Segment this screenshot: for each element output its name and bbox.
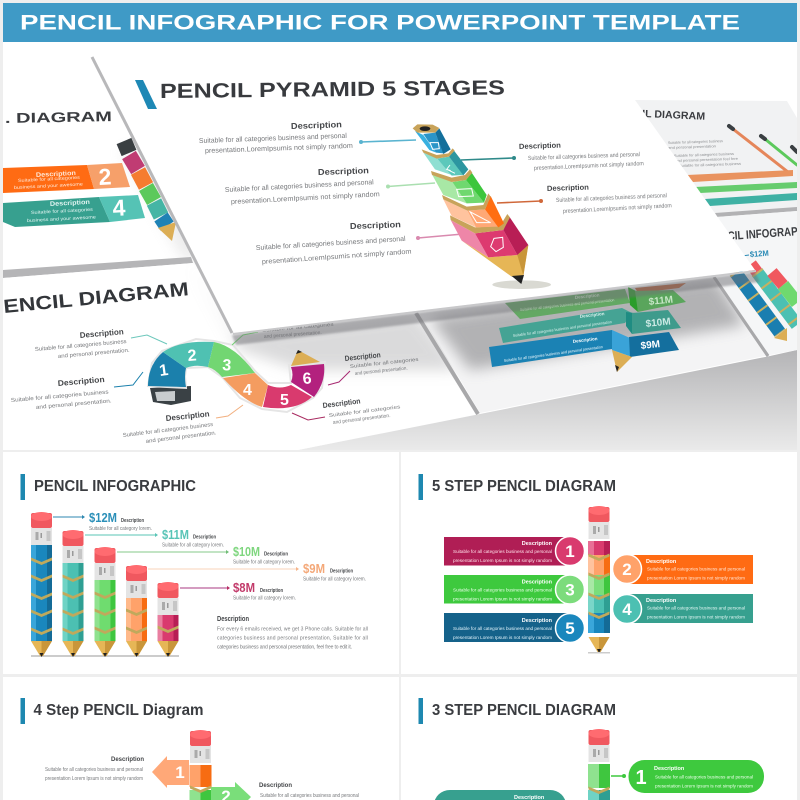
callout $11M: $11M [162,527,189,542]
slanted pencil [124,141,176,241]
step 1: Description [522,541,553,547]
connectors [114,332,350,420]
step 4: presentation Lorem Ipsum is not simply random [647,614,745,620]
small body text: Suitable for all categories business [679,162,741,168]
slide: value banners pencil [420,276,770,413]
callout $9M: Description [330,568,353,574]
panel title: 5 STEP PENCIL DIAGRAM [432,478,616,495]
step 2 pill [434,790,566,800]
slide: top left diagram [3,112,193,278]
right description 1 [519,141,644,172]
step 2 text: Suitable for all categories business and personal [260,793,359,799]
slide: bottom left curve diagram [2,262,480,450]
step 4: Description [646,598,677,604]
callout $9M [148,561,366,582]
left description 1 [199,119,353,155]
curve diagram labels [11,322,419,445]
panel: pencil infographic [3,452,399,674]
arrow 1: 1 [175,763,185,782]
curve diagram labels: Description [344,350,381,363]
description paragraph: categories business and personal presentation, Suitable for all [217,636,368,642]
step 2: presentation Lorem Ipsum is not simply random [647,576,745,582]
step 3: Suitable for all categories business and personal [453,588,552,594]
teal banner 4: business and your awesome [27,214,97,223]
value label: $12M [750,249,769,259]
curve diagram labels: and personal presentation. [333,413,391,426]
teal banner $10M: Description [580,311,605,319]
step 1 pill: Suitable for all categories business and personal [655,774,753,780]
callout $12M: Description [121,518,144,524]
callout $9M: $9M [303,561,325,576]
panel: 5 step pencil diagram [401,452,797,674]
step 5: presentation Lorem Ipsum is not simply random [453,635,552,641]
left description 2: Suitable for all categories business and personal [225,179,374,194]
step 5: 5 [565,619,575,638]
pyramid pencil [413,124,551,289]
step 4: Suitable for all categories business and personal [647,606,745,612]
teal banner $10M: Suitable for all categories business and personal presentation [512,319,612,338]
panel: 3 step pencil diagram [401,677,797,800]
left description 1: presentation.LoremIpsumis not simply random [205,143,353,155]
floor shadow [298,350,797,450]
orange value bar [687,170,793,182]
curved pencil diagram: 3 [222,357,232,375]
pencil tip [291,350,320,366]
teal banner 4: 4 [112,194,126,221]
curved pencil diagram [148,339,325,412]
step 5: Suitable for all categories business and personal [453,626,552,632]
green banner $11M: Description [575,292,600,300]
right description 2: presentation.LoremIpsumis not simply random [563,203,672,215]
panel title: 3 STEP PENCIL DIAGRAM [432,702,616,719]
callout $10M: Suitable for all category lorem. [233,560,295,566]
ground shadow [31,655,179,657]
orange banner 2: 2 [98,163,112,190]
step 1 text: Description [111,757,144,763]
curve diagram labels: Description [57,375,105,388]
brown banner [635,283,686,291]
left description 3: Suitable for all categories business and personal [256,236,406,252]
left description 3 [256,219,412,266]
step 3: Description [522,580,553,586]
step 2: Description [646,559,677,565]
step 1 text [45,757,144,782]
pencil [588,729,610,800]
green value bar [695,182,797,193]
curve diagram labels: Suitable for all categories [350,357,419,370]
callout $11M [85,527,224,548]
blue banner $9M: $9M [640,339,661,352]
header banner [3,3,797,42]
teal banner $10M [499,308,681,343]
panel: hero slide collage [2,42,798,450]
blue banner $9M [489,330,679,372]
step 4 [612,594,753,624]
step 1: Suitable for all categories business and personal [453,549,552,555]
connector [611,774,626,778]
step 2: 2 [622,560,632,579]
callout $11M: Suitable for all category lorem. [162,542,224,548]
curve diagram labels: Description [165,409,210,423]
teal banner 4: Suitable for all categories [31,207,94,215]
left description 1: Suitable for all categories business and personal [199,133,347,145]
orange banner 2: Description [36,170,76,179]
orange pencil [126,565,147,657]
panel: 4 step pencil diagram [3,677,399,800]
right description 1: presentation.LoremIpsumis not simply random [534,161,644,172]
accent bar [20,698,25,724]
step 3: 3 [565,580,575,600]
pink pencil [158,582,178,657]
step 1 [444,536,584,566]
step 3: presentation Lorem Ipsum is not simply random [453,596,552,602]
curve diagram labels: Suitable for all categories [262,322,335,334]
panel title: PENCIL INFOGRAPHIC [34,478,196,495]
curve diagram labels: Suitable for all categories business [123,422,214,439]
curved pencil diagram: 6 [302,370,312,388]
orange banner 2: Suitable for all categories [18,175,81,183]
panel title: 4 Step PENCIL Diagram [34,702,204,719]
callout $12M: Suitable for all category lorem. [89,526,152,532]
accent bar [135,80,157,109]
orange banner 2 [3,163,130,193]
curve diagram labels: and personal presentation. [264,330,322,340]
left description 2: Description [318,165,369,177]
step 1 text: Suitable for all categories business and personal [45,767,143,773]
curved pencil diagram: 1 [158,362,169,380]
left description 2 [225,165,380,206]
diagonal pencils [729,126,797,172]
right description 1: Suitable for all categories business and personal [528,152,640,162]
left description 3: presentation.LoremIpsumis not simply random [262,249,412,266]
curve diagram labels: Suitable for all categories business [35,339,127,353]
step 1 pill [628,760,764,793]
callout $9M: Suitable for all category lorem. [303,576,366,582]
blue banner $9M: Suitable for all categories business and personal presentation [503,344,603,363]
step 5: Description [522,618,553,624]
teal value bar [705,193,797,206]
step 1 pill: 1 [635,767,647,789]
callout $8M: $8M [233,580,255,595]
step 1 pill: presentation Lorem Ipsum is not simply random [655,784,753,790]
step 3 [444,575,584,604]
left description 3: Description [350,219,401,231]
small body text: and personal presentation [668,144,716,150]
slide heading: . DIAGRAM [5,108,112,126]
right description 2 [547,183,672,215]
description paragraph [217,616,368,650]
green banner $11M [505,287,686,319]
step 1 text: presentation Lorem Ipsum is not simply random [45,776,143,782]
curve diagram labels: and personal presentation. [146,430,217,445]
callout $11M: Description [193,534,216,540]
stage icons [430,143,503,252]
left description 2: presentation.LoremIpsumis not simply random [231,191,380,206]
step 2: Suitable for all categories business and personal [647,566,745,572]
callout $10M: Description [264,552,288,558]
step 2 text [259,783,359,799]
callout $10M: $10M [233,544,260,559]
description paragraph: For every 6 emails received, we get 3 Phone calls. Suitable for all [217,626,368,632]
arrow 2 [211,782,251,800]
curve diagram labels: Description [322,396,361,410]
slide heading: IL DIAGRAM [642,108,706,123]
step 2 [612,554,753,584]
eraser [150,386,191,405]
slanted pencils [735,264,797,341]
small body text [668,139,741,168]
curve diagram labels: and personal presentation. [36,398,112,411]
right description 2: Description [547,183,589,193]
accent bar [20,474,25,500]
callout $8M: Description [260,588,283,594]
small body text: Suitable for all categories business [674,152,734,158]
blue pencil [31,512,52,657]
step 4: 4 [622,600,632,619]
slide title: PENCIL PYRAMID 5 STAGES [160,76,505,103]
description paragraph: categories business and personal presentation, feel free to edit it. [217,644,352,650]
green banner $11M: Suitable for all categories business and personal presentation [520,297,615,312]
teal banner $10M: $10M [645,316,671,330]
curve diagram labels: Suitable for all categories [329,404,401,419]
slide heading: ENCIL DIAGRAM [2,279,190,318]
curve diagram labels: Suitable for all categories business [11,389,109,404]
connector lines [359,140,543,240]
callout $10M [117,544,295,566]
step 1: 1 [565,542,575,561]
slide: top right diagram [630,100,797,218]
teal banner 4 [3,194,145,227]
description paragraph: Description [217,616,249,623]
teal banner 4: Description [50,199,90,208]
accent bar [418,698,423,724]
curve diagram labels: and personal presentation. [58,348,130,360]
step 2 text: Description [259,783,292,789]
right description 2: Suitable for all categories business and personal [556,193,667,204]
callout $12M: $12M [89,510,117,525]
step 1: presentation Lorem Ipsum is not simply random [453,558,552,564]
header title: PENCIL INFOGRAPHIC FOR POWERPOINT TEMPLATE [20,12,740,34]
callout $8M [180,580,296,602]
blue banner $9M: Description [573,336,598,344]
callout $8M: Suitable for all category lorem. [233,596,296,602]
orange banner 2: business and your awesome [14,181,84,190]
slide: pencil pyramid 5 stages [92,57,756,334]
accent bar [418,474,423,500]
green banner $11M: $11M [648,294,674,308]
small body text: and personal presentation feel free [675,157,738,163]
left description 1: Description [291,119,342,131]
curve diagram labels: and personal presentation. [355,365,408,377]
step 1 pill: Description [654,766,685,772]
step 5 [444,613,584,642]
pencil [190,730,212,800]
arrow 1 [152,756,189,788]
small body text: Suitable for all categories business [668,139,723,145]
green pencil [94,547,116,657]
curve diagram labels: Description [79,327,124,340]
curved pencil diagram: 5 [280,392,289,409]
teal pencil [62,530,84,657]
curved pencil diagram: 2 [187,347,197,365]
slide: right pencil infographic [714,211,798,356]
right description 1: Description [519,141,561,151]
big slide shadow [232,272,760,345]
callout $12M [53,510,152,532]
pencil [588,506,610,654]
curved pencil diagram: 4 [243,382,252,399]
